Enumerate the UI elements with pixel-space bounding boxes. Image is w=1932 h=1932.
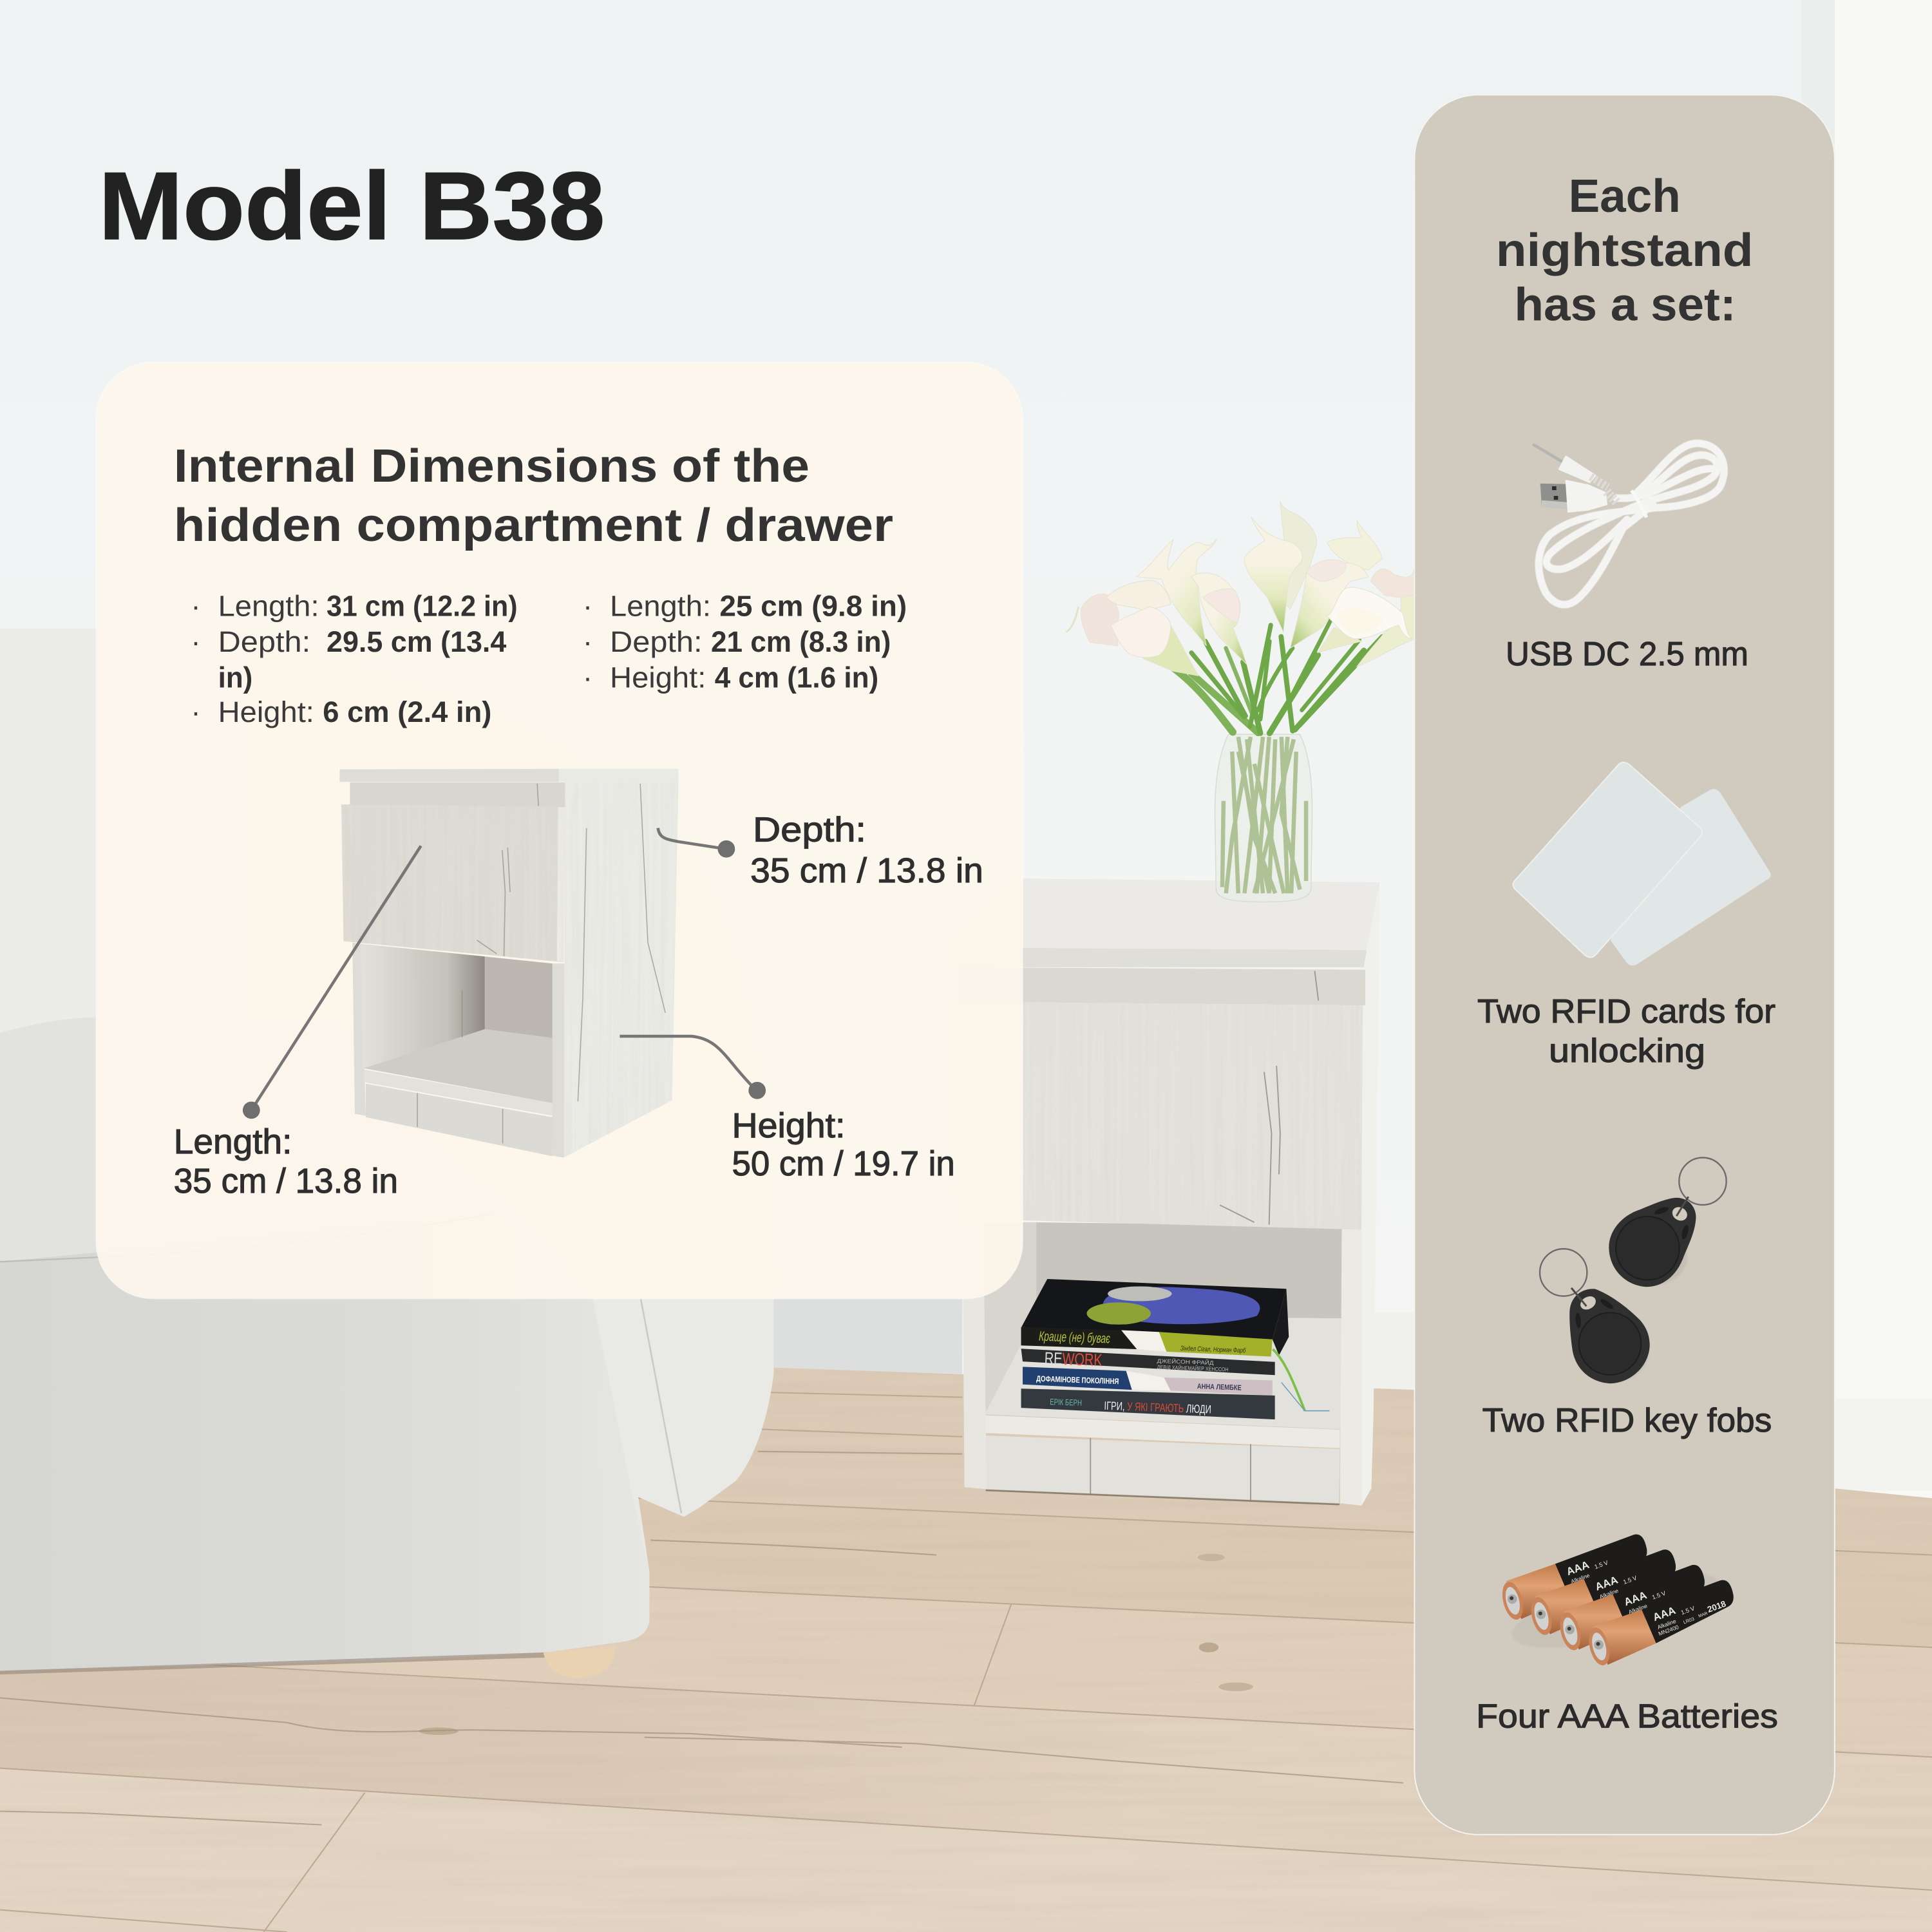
icon: AAA batteries: Alkaline [1627, 1602, 1648, 1615]
bullet list: drawer dimensions: 4 cm (1.6 in) [715, 661, 878, 694]
bullet list: hidden compartment dimensions: · [191, 625, 201, 658]
leader line: depth [658, 828, 735, 858]
sofa [0, 629, 774, 1678]
label: depth: 35 cm / 13.8 in [750, 852, 983, 890]
heading: each nightstand has a set [1496, 170, 1754, 330]
icon: AAA batteries: AAA [1565, 1558, 1591, 1578]
bullet list: drawer dimensions: Length: [610, 590, 711, 623]
bullet list: hidden compartment dimensions: Depth: [218, 625, 310, 658]
label: depth [750, 811, 983, 890]
leader line: height [620, 1036, 766, 1099]
vase with calla lilies [1066, 501, 1414, 902]
icon: AAA batteries: MAR [1698, 1611, 1709, 1619]
bullet list: hidden compartment dimensions [191, 590, 518, 728]
label: USB DC: USB DC 2.5 mm [1506, 635, 1748, 672]
bullet list: drawer dimensions [583, 590, 907, 694]
bullet list: hidden compartment dimensions: 29.5 cm (13.4 [327, 625, 506, 658]
label: depth: Depth: [753, 811, 866, 849]
bullet list: hidden compartment dimensions: · [191, 696, 201, 728]
baseboard [739, 1299, 1414, 1390]
bullet list: hidden compartment dimensions: 31 cm (12.2 in) [327, 590, 518, 623]
bullet list: hidden compartment dimensions: Length: [218, 590, 319, 623]
book spine titles: Краще (не) буває [1039, 1329, 1111, 1347]
book spine titles: ДЖЕЙСОН ФРАЙД [1157, 1357, 1214, 1366]
icon: AAA batteries: 1.5 V [1593, 1559, 1609, 1570]
label: height [732, 1107, 955, 1183]
bullet list: drawer dimensions: Depth: [610, 625, 703, 658]
bullet list: drawer dimensions: · [583, 661, 592, 694]
leader line: length [243, 846, 421, 1119]
icon: AAA batteries: MN2400 [1658, 1624, 1680, 1637]
lily stems [1168, 618, 1382, 734]
icon: AAA batteries: 1.5 V [1622, 1575, 1638, 1586]
icon: RFID key fobs [1540, 1158, 1727, 1383]
bullet list: hidden compartment dimensions: · [191, 590, 201, 623]
icon: AAA batteries: AAA [1651, 1604, 1677, 1624]
label: RFID cards: unlocking [1549, 1032, 1705, 1069]
lily blooms [1066, 501, 1414, 676]
sofa wooden foot [544, 1646, 615, 1678]
panel: set contents [1414, 95, 1835, 1835]
book spine titles: ДЕВІД ХАЙНЕМАЙЕР ХЕНССОН [1157, 1363, 1229, 1373]
heading: each nightstand has a set: Each [1569, 170, 1681, 222]
book spine titles: ІГРИ, У ЯКІ ГРАЮТЬ ЛЮДИ [1104, 1399, 1211, 1416]
bullet list: drawer dimensions: Height: [610, 661, 706, 694]
label: batteries: Four AAA Batteries [1476, 1697, 1778, 1734]
heading: internal dimensions [174, 440, 893, 551]
panel: internal dimensions [96, 362, 1023, 1299]
label: key fobs: Two RFID key fobs [1482, 1401, 1772, 1439]
icon: AAA batteries: LR03 [1682, 1616, 1695, 1625]
icon: AAA batteries: 2018 [1706, 1599, 1727, 1615]
bullet list: hidden compartment dimensions: in) [218, 661, 252, 694]
wooden floor [0, 1356, 1932, 1932]
book spine titles [1036, 1329, 1246, 1416]
heading: internal dimensions: hidden compartment / drawer [174, 499, 893, 551]
bullet list: drawer dimensions: · [583, 590, 592, 623]
bullet list: hidden compartment dimensions: 6 cm (2.4 in) [323, 696, 491, 728]
right wall pillar [1835, 0, 1932, 1499]
label: RFID cards: Two RFID cards for [1477, 992, 1776, 1030]
icon: AAA batteries: AAA [1622, 1589, 1649, 1608]
icon: AAA batteries: AAA [1593, 1574, 1620, 1593]
book spine titles: ДОФАМІНОВЕ ПОКОЛІННЯ [1036, 1374, 1119, 1386]
icon: AAA batteries: Alkaline [1598, 1587, 1620, 1600]
book spine titles: Зіндел Сігал, Норман Фарб [1180, 1345, 1246, 1355]
icon: AAA batteries [1499, 1534, 1734, 1667]
bullet list: drawer dimensions: 25 cm (9.8 in) [719, 590, 907, 623]
label: height: 50 cm / 19.7 in [732, 1145, 955, 1183]
label: RFID cards [1477, 992, 1776, 1069]
heading: each nightstand has a set: nightstand [1496, 224, 1754, 276]
icon: USB cable [1534, 443, 1724, 605]
bullet list: hidden compartment dimensions: Height: [218, 696, 314, 728]
heading: internal dimensions: Internal Dimensions of the [174, 440, 810, 492]
title: Model B38 [99, 152, 605, 260]
label: length: 35 cm / 13.8 in [174, 1162, 398, 1200]
label: height: Height: [732, 1107, 845, 1145]
icon: AAA batteries: 1.5 V [1680, 1605, 1696, 1616]
book spine titles: REWORK [1044, 1349, 1103, 1370]
large nightstand [949, 878, 1380, 1506]
label: length [174, 1123, 398, 1200]
bullet list: drawer dimensions: 21 cm (8.3 in) [711, 625, 891, 658]
icon: RFID cards [1513, 762, 1771, 965]
bullet list: drawer dimensions: · [583, 625, 592, 658]
icon: AAA batteries: 1.5 V [1651, 1589, 1667, 1601]
icon: AAA batteries: Alkaline [1656, 1618, 1677, 1631]
nightstand diagram [339, 769, 684, 1160]
label: length: Length: [174, 1123, 292, 1161]
book spine titles: ЕРІК БЕРН [1050, 1397, 1082, 1408]
book spine titles: АННА ЛЕМБКЕ [1197, 1383, 1242, 1392]
heading: each nightstand has a set: has a set: [1514, 278, 1736, 330]
stack of books [1021, 1279, 1329, 1419]
icon: AAA batteries: Alkaline [1570, 1572, 1591, 1585]
